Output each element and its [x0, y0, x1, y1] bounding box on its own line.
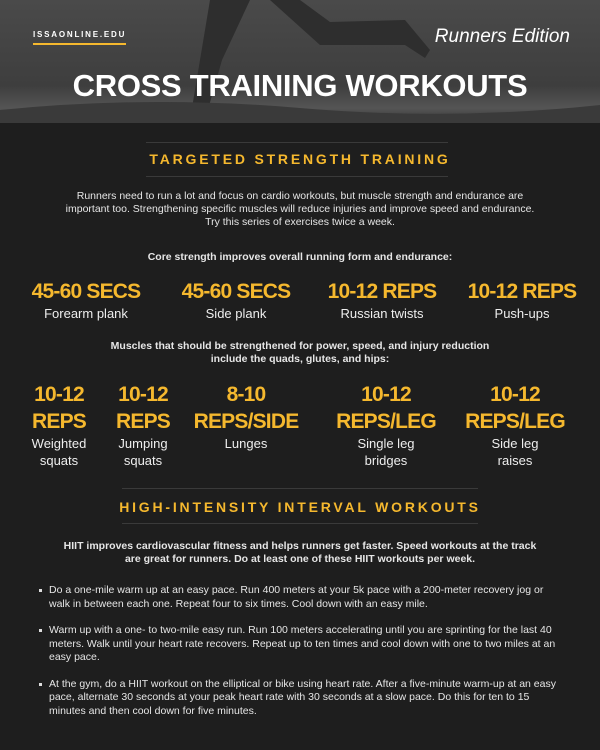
heading: targeted strength: TARGETED STRENGTH TRAINING — [149, 151, 451, 167]
core stats — [32, 280, 576, 321]
brand — [33, 30, 126, 45]
leg stats: 8-10 — [227, 383, 265, 406]
leg stats: Side leg — [492, 436, 538, 451]
HIIT intro — [64, 540, 536, 565]
leg stats: raises — [498, 453, 532, 468]
leg stats: 10-12 — [118, 383, 168, 406]
core stats: 10-12 REPS — [328, 280, 436, 303]
title: CROSS TRAINING WORKOUTS — [73, 68, 527, 103]
leg stats: 10-12 — [361, 383, 411, 406]
leg stats: 10-12 — [490, 383, 540, 406]
leg stats: Weighted — [32, 436, 86, 451]
HIIT intro: are great for runners. Do at least one of these HIIT workouts per week. — [125, 553, 475, 565]
muscles subheading — [111, 340, 489, 365]
intro text: Runners need to run a lot and focus on cardio workouts, but muscle strength and endurance are important too. Strengthening specific muscles will reduce injuries and improve speed and endurance. Try this series of exercises twice a week. — [66, 190, 534, 228]
muscles subheading: include the quads, glutes, and hips: — [211, 353, 389, 365]
leg stats: bridges — [365, 453, 407, 468]
leg stats: Jumping — [118, 436, 168, 451]
leg stats: squats — [40, 453, 78, 468]
HIIT list: Warm up with a one- to two-mile easy run. Run 100 meters accelerating until you are sprinting for the last 40 meters. Walk until your heart rate recovers. Repeat up to ten times and cool down with one to two miles at an easy pace. — [49, 624, 555, 663]
core stats: 45-60 SECS — [32, 280, 140, 303]
core stats: Russian twists — [340, 306, 424, 321]
core stats: Push-ups — [495, 306, 549, 321]
HIIT intro: HIIT improves cardiovascular fitness and helps runners get faster. Speed workouts at the track — [64, 540, 536, 552]
leg stats — [32, 383, 565, 468]
leg stats: REPS/LEG — [336, 410, 436, 433]
leg stats: Lunges — [225, 436, 267, 451]
leg stats: REPS/LEG — [465, 410, 565, 433]
edition: Runners Edition — [435, 26, 570, 47]
leg stats: REPS — [116, 410, 170, 433]
HIIT list: At the gym, do a HIIT workout on the elliptical or bike using heart rate. After a five-minute warm-up at an easy pace, alternate 30 seconds at your peak heart rate with 30 seconds at a slow pace. Do this for ten to 15 minutes and then cool down for five minutes. — [49, 678, 556, 716]
heading: HIIT: HIGH-INTENSITY INTERVAL WORKOUTS — [119, 499, 481, 515]
leg stats: Single leg — [357, 436, 415, 451]
core stats: Side plank — [206, 306, 266, 321]
brand: ISSAONLINE.EDU — [33, 30, 126, 39]
leg stats: REPS — [32, 410, 86, 433]
core stats: 10-12 REPS — [468, 280, 576, 303]
HIIT list: Do a one-mile warm up at an easy pace. Run 400 meters at your 5k pace with a 200-meter recovery jog or walk in between each one. Repeat four to six times. Cool down with an easy mile. — [49, 584, 543, 610]
core subheading: Core strength improves overall running form and endurance: — [148, 251, 452, 263]
core stats: Forearm plank — [44, 306, 128, 321]
leg stats: REPS/SIDE — [194, 410, 298, 433]
HIIT list — [39, 584, 556, 716]
header photo — [0, 0, 600, 123]
leg stats: squats — [124, 453, 162, 468]
core stats: 45-60 SECS — [182, 280, 290, 303]
muscles subheading: Muscles that should be strengthened for power, speed, and injury reduction — [111, 340, 489, 352]
leg stats: 10-12 — [34, 383, 84, 406]
